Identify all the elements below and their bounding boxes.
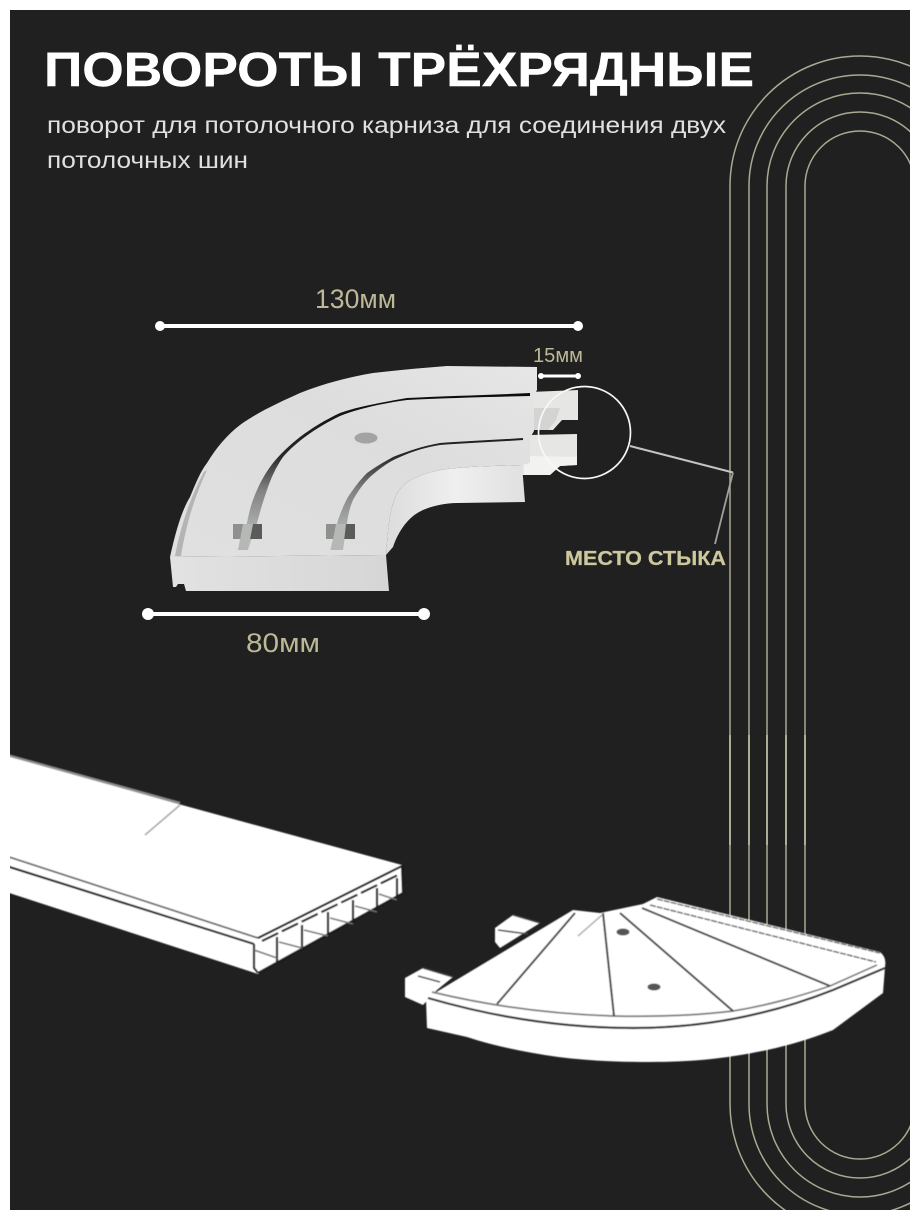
decorative gold racetrack lines xyxy=(730,56,920,1220)
fan body xyxy=(426,897,885,1062)
rail lengthwise grooves xyxy=(0,854,258,938)
dimension: 130 mm: 130мм xyxy=(315,284,396,314)
groove 1 xyxy=(238,393,530,550)
fan back edges xyxy=(650,899,880,962)
subtitle xyxy=(47,112,727,173)
title: ПОВОРОТЫ ТРЁХРЯДНЫЕ xyxy=(44,44,754,97)
rail tick xyxy=(145,805,180,835)
rail body xyxy=(0,754,404,974)
drawing: fan-shaped corner piece xyxy=(405,897,885,1062)
fan radial grooves xyxy=(497,908,830,1016)
fan tabs xyxy=(405,915,540,1005)
groove 2 xyxy=(330,438,523,550)
rail top edge xyxy=(0,753,180,803)
fan front grooves xyxy=(428,968,885,1028)
slot crosses xyxy=(233,524,355,550)
fan tick xyxy=(578,915,602,936)
photo: three-row ceiling corner piece xyxy=(170,366,578,591)
rail end cells xyxy=(254,866,403,973)
dimension: 15 mm: 15мм xyxy=(533,345,583,367)
dimension: 130 mm xyxy=(155,284,583,331)
mounting hole xyxy=(354,432,378,444)
subtitle: потолочных шин xyxy=(47,147,248,173)
dimension: 15 mm xyxy=(533,345,583,379)
subtitle: поворот для потолочного карниза для соединения двух xyxy=(47,112,727,138)
front face xyxy=(170,555,389,591)
callout: joint location xyxy=(538,386,733,570)
dimension: 80 mm xyxy=(142,608,430,658)
top surface xyxy=(170,366,537,557)
dimension: 80 mm: 80мм xyxy=(246,628,320,658)
connector tabs xyxy=(522,390,578,475)
drawing: ceiling rail profile xyxy=(0,753,404,974)
inner curved wall xyxy=(386,465,525,555)
fan holes xyxy=(616,928,630,936)
callout: joint location: МЕСТО СТЫКА xyxy=(565,548,726,570)
left edge shading xyxy=(175,470,207,556)
